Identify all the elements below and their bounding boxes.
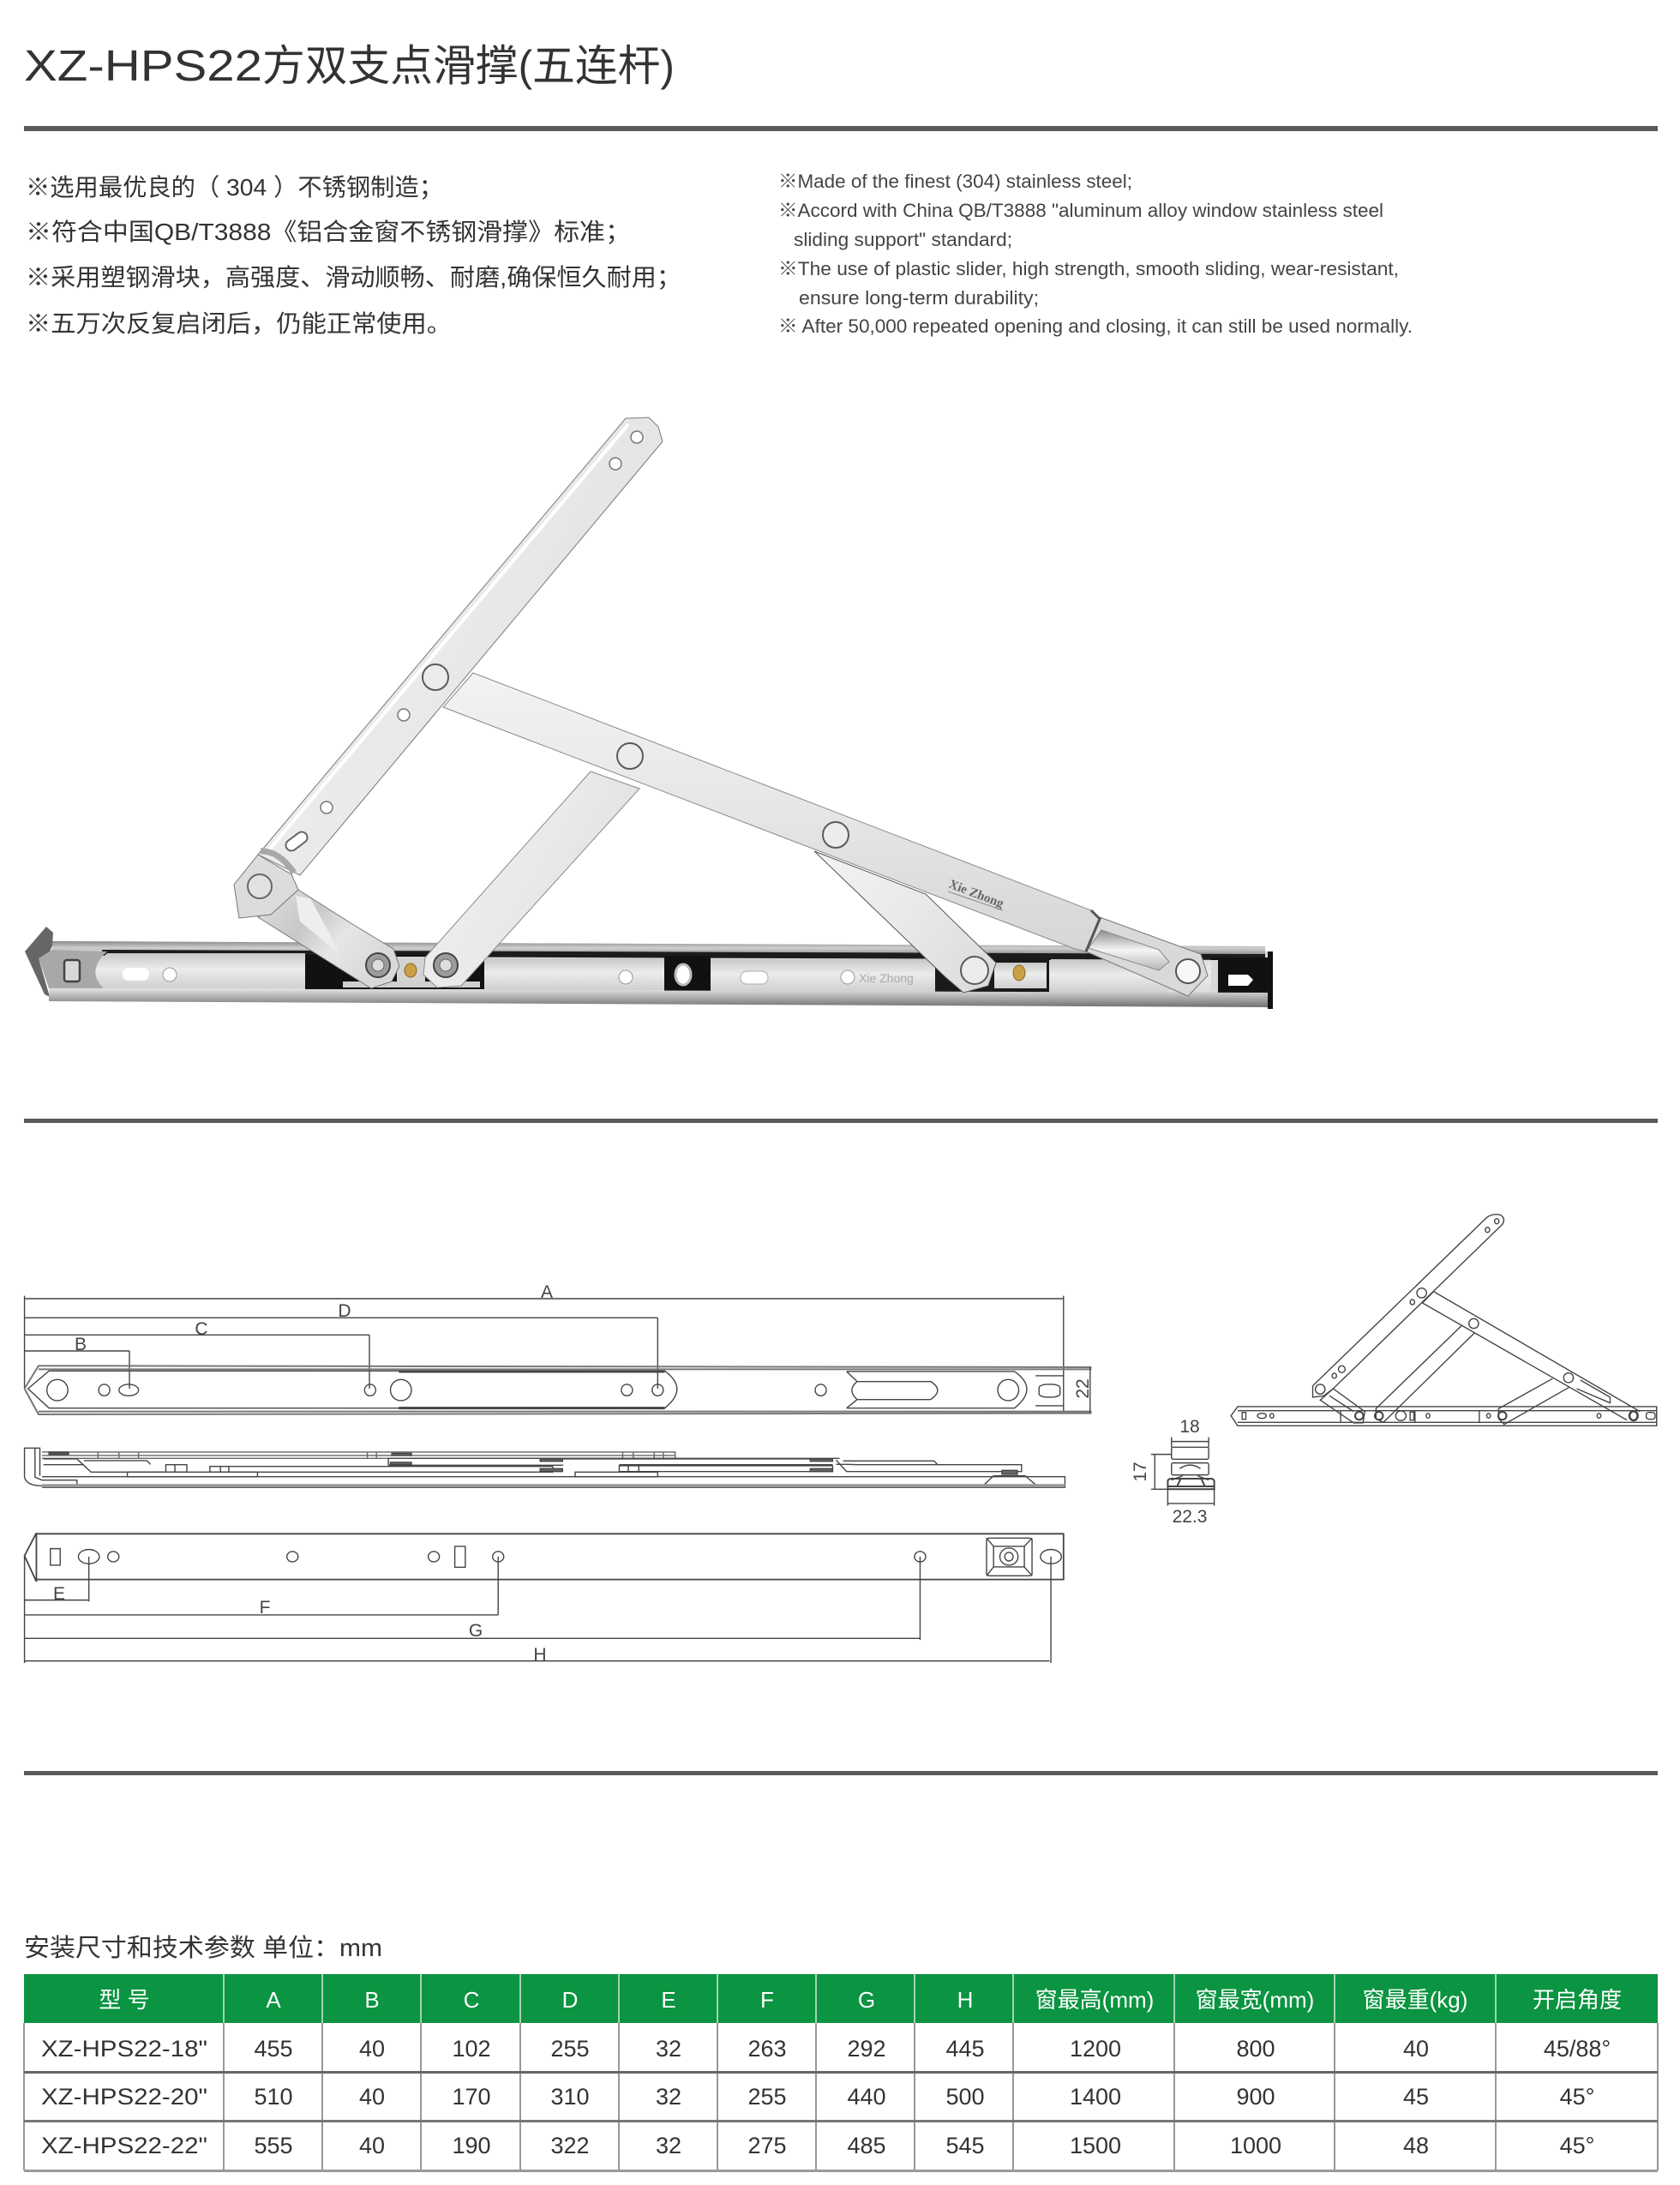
table header: F	[760, 1987, 774, 2013]
English feature list: ※The use of plastic slider, high strength, smooth sliding, wear-resistant,	[778, 258, 1399, 279]
row: 20 inch: 440	[847, 2084, 886, 2110]
row: 20 inch: XZ-HPS22-20"	[41, 2084, 207, 2110]
dimension labels	[53, 1584, 547, 1665]
row: 18 inch: 1200	[1070, 2036, 1121, 2062]
row: 18 inch: 32	[656, 2036, 681, 2062]
Chinese feature list: ※采用塑钢滑块，高强度、滑动顺畅、耐磨,确保恒久耐用；	[26, 264, 681, 291]
dimension labels: G	[469, 1621, 483, 1641]
dimension labels: D	[338, 1301, 351, 1321]
row: 22 inch	[41, 2133, 1594, 2158]
table header: G	[858, 1987, 875, 2013]
row: 20 inch: 45°	[1560, 2084, 1594, 2110]
row: 20 inch: 1400	[1070, 2084, 1121, 2110]
cross-section drawing with 18 / 17 / 22.3 dimensions	[1131, 1417, 1215, 1527]
dimension labels: 22.3	[1173, 1507, 1207, 1527]
row: 22 inch: 48	[1403, 2133, 1429, 2158]
row: 22 inch: 1500	[1070, 2133, 1121, 2158]
title: XZ-HPS22	[24, 41, 262, 90]
lower-left link	[258, 890, 399, 988]
row: 22 inch: XZ-HPS22-22"	[41, 2133, 207, 2158]
row: 22 inch: 275	[747, 2133, 787, 2158]
dimension labels: 17	[1131, 1462, 1150, 1482]
dimension labels: A	[541, 1282, 553, 1302]
table header: A	[266, 1987, 281, 2013]
bottom view drawing with E F G H	[25, 1533, 1064, 1665]
row: 18 inch: XZ-HPS22-18"	[41, 2036, 207, 2062]
English feature list	[778, 171, 1413, 337]
row: 22 inch: 190	[452, 2133, 491, 2158]
English feature list: ※Accord with China QB/T3888 "aluminum alloy window stainless steel	[778, 200, 1383, 221]
row: 20 inch: 255	[747, 2084, 787, 2110]
row: 20 inch	[41, 2084, 1594, 2110]
title	[24, 41, 675, 90]
row: 18 inch: 445	[945, 2036, 985, 2062]
row: 18 inch: 292	[847, 2036, 886, 2062]
English feature list: ensure long-term durability;	[799, 287, 1039, 309]
table heading: 安装尺寸和技术参数 单位：mm	[24, 1934, 382, 1962]
row: 18 inch: 45/88°	[1544, 2036, 1611, 2062]
table header: 开启角度	[1533, 1987, 1622, 2013]
table header: 窗最高(mm)	[1035, 1987, 1154, 2013]
sash arm	[234, 417, 663, 918]
plate stamp text: Xie Zhong	[859, 971, 914, 985]
table header: 窗最重(kg)	[1363, 1987, 1467, 2013]
table header	[24, 1974, 1658, 2023]
dimension labels	[75, 1282, 1093, 1399]
row: 20 inch: 500	[945, 2084, 985, 2110]
row: 22 inch: 545	[945, 2133, 985, 2158]
row: 20 inch: 510	[254, 2084, 293, 2110]
table header: H	[957, 1987, 973, 2013]
row: 18 inch: 40	[1403, 2036, 1429, 2062]
row: 18 inch: 800	[1236, 2036, 1275, 2062]
dimension labels: F	[260, 1598, 270, 1618]
dimension drawing: top view with A B C D	[25, 1282, 1093, 1414]
dimension labels: E	[53, 1584, 65, 1604]
row: 18 inch: 255	[550, 2036, 590, 2062]
main support arm	[443, 673, 1208, 996]
row: 22 inch: 555	[254, 2133, 293, 2158]
English feature list: ※ After 50,000 repeated opening and closing, it can still be used normally.	[778, 315, 1413, 337]
table header: B	[364, 1987, 380, 2013]
row: 20 inch: 170	[452, 2084, 491, 2110]
row: 18 inch: 40	[359, 2036, 385, 2062]
row: 22 inch: 45°	[1560, 2133, 1594, 2158]
table header: E	[661, 1987, 676, 2013]
dimension labels: H	[533, 1645, 547, 1665]
Chinese feature list: ※选用最优良的（ 304 ）不锈钢制造；	[26, 174, 443, 201]
table header: C	[464, 1987, 479, 2013]
row: 18 inch: 102	[452, 2036, 491, 2062]
English feature list: sliding support" standard;	[794, 229, 1012, 250]
row: 20 inch: 40	[359, 2084, 385, 2110]
row: 22 inch: 32	[656, 2133, 681, 2158]
row: 20 inch: 32	[656, 2084, 681, 2110]
dimension labels: C	[195, 1319, 208, 1339]
brand stamp on arm: Xie Zhong	[947, 878, 1005, 911]
Chinese feature list: ※符合中国QB/T3888《铝合金窗不锈钢滑撑》标准；	[26, 219, 631, 245]
row: 18 inch: 455	[254, 2036, 293, 2062]
row: 20 inch: 310	[550, 2084, 590, 2110]
row: 20 inch: 45	[1403, 2084, 1429, 2110]
row: 22 inch: 322	[550, 2133, 590, 2158]
base rail	[25, 927, 1273, 1009]
row: 22 inch: 40	[359, 2133, 385, 2158]
row: 18 inch: 263	[747, 2036, 787, 2062]
dimension labels	[1131, 1417, 1207, 1527]
row: 22 inch: 485	[847, 2133, 886, 2158]
dimension labels: 18	[1179, 1417, 1200, 1437]
row: 22 inch: 1000	[1230, 2133, 1281, 2158]
left strut	[423, 771, 639, 987]
table header: D	[562, 1987, 578, 2013]
title: 方双支点滑撑(五连杆)	[262, 42, 675, 90]
Chinese feature list: ※五万次反复启闭后，仍能正常使用。	[26, 310, 452, 337]
table header: 窗最宽(mm)	[1196, 1987, 1314, 2013]
right strut	[814, 851, 996, 993]
English feature list: ※Made of the finest (304) stainless steel;	[778, 171, 1132, 192]
row: 18 inch	[41, 2036, 1611, 2062]
table header: 型 号	[99, 1987, 150, 2013]
small line drawing of opened hinge	[1231, 1215, 1657, 1426]
specification table	[24, 1974, 1658, 2172]
row: 20 inch: 900	[1236, 2084, 1275, 2110]
side view drawing	[25, 1448, 1065, 1487]
table grid	[24, 2023, 1658, 2170]
dimension labels: B	[75, 1335, 87, 1354]
product photo: stainless steel friction stay hinge	[25, 417, 1273, 1009]
Chinese feature list	[26, 174, 681, 337]
dimension labels: 22	[1073, 1378, 1093, 1399]
